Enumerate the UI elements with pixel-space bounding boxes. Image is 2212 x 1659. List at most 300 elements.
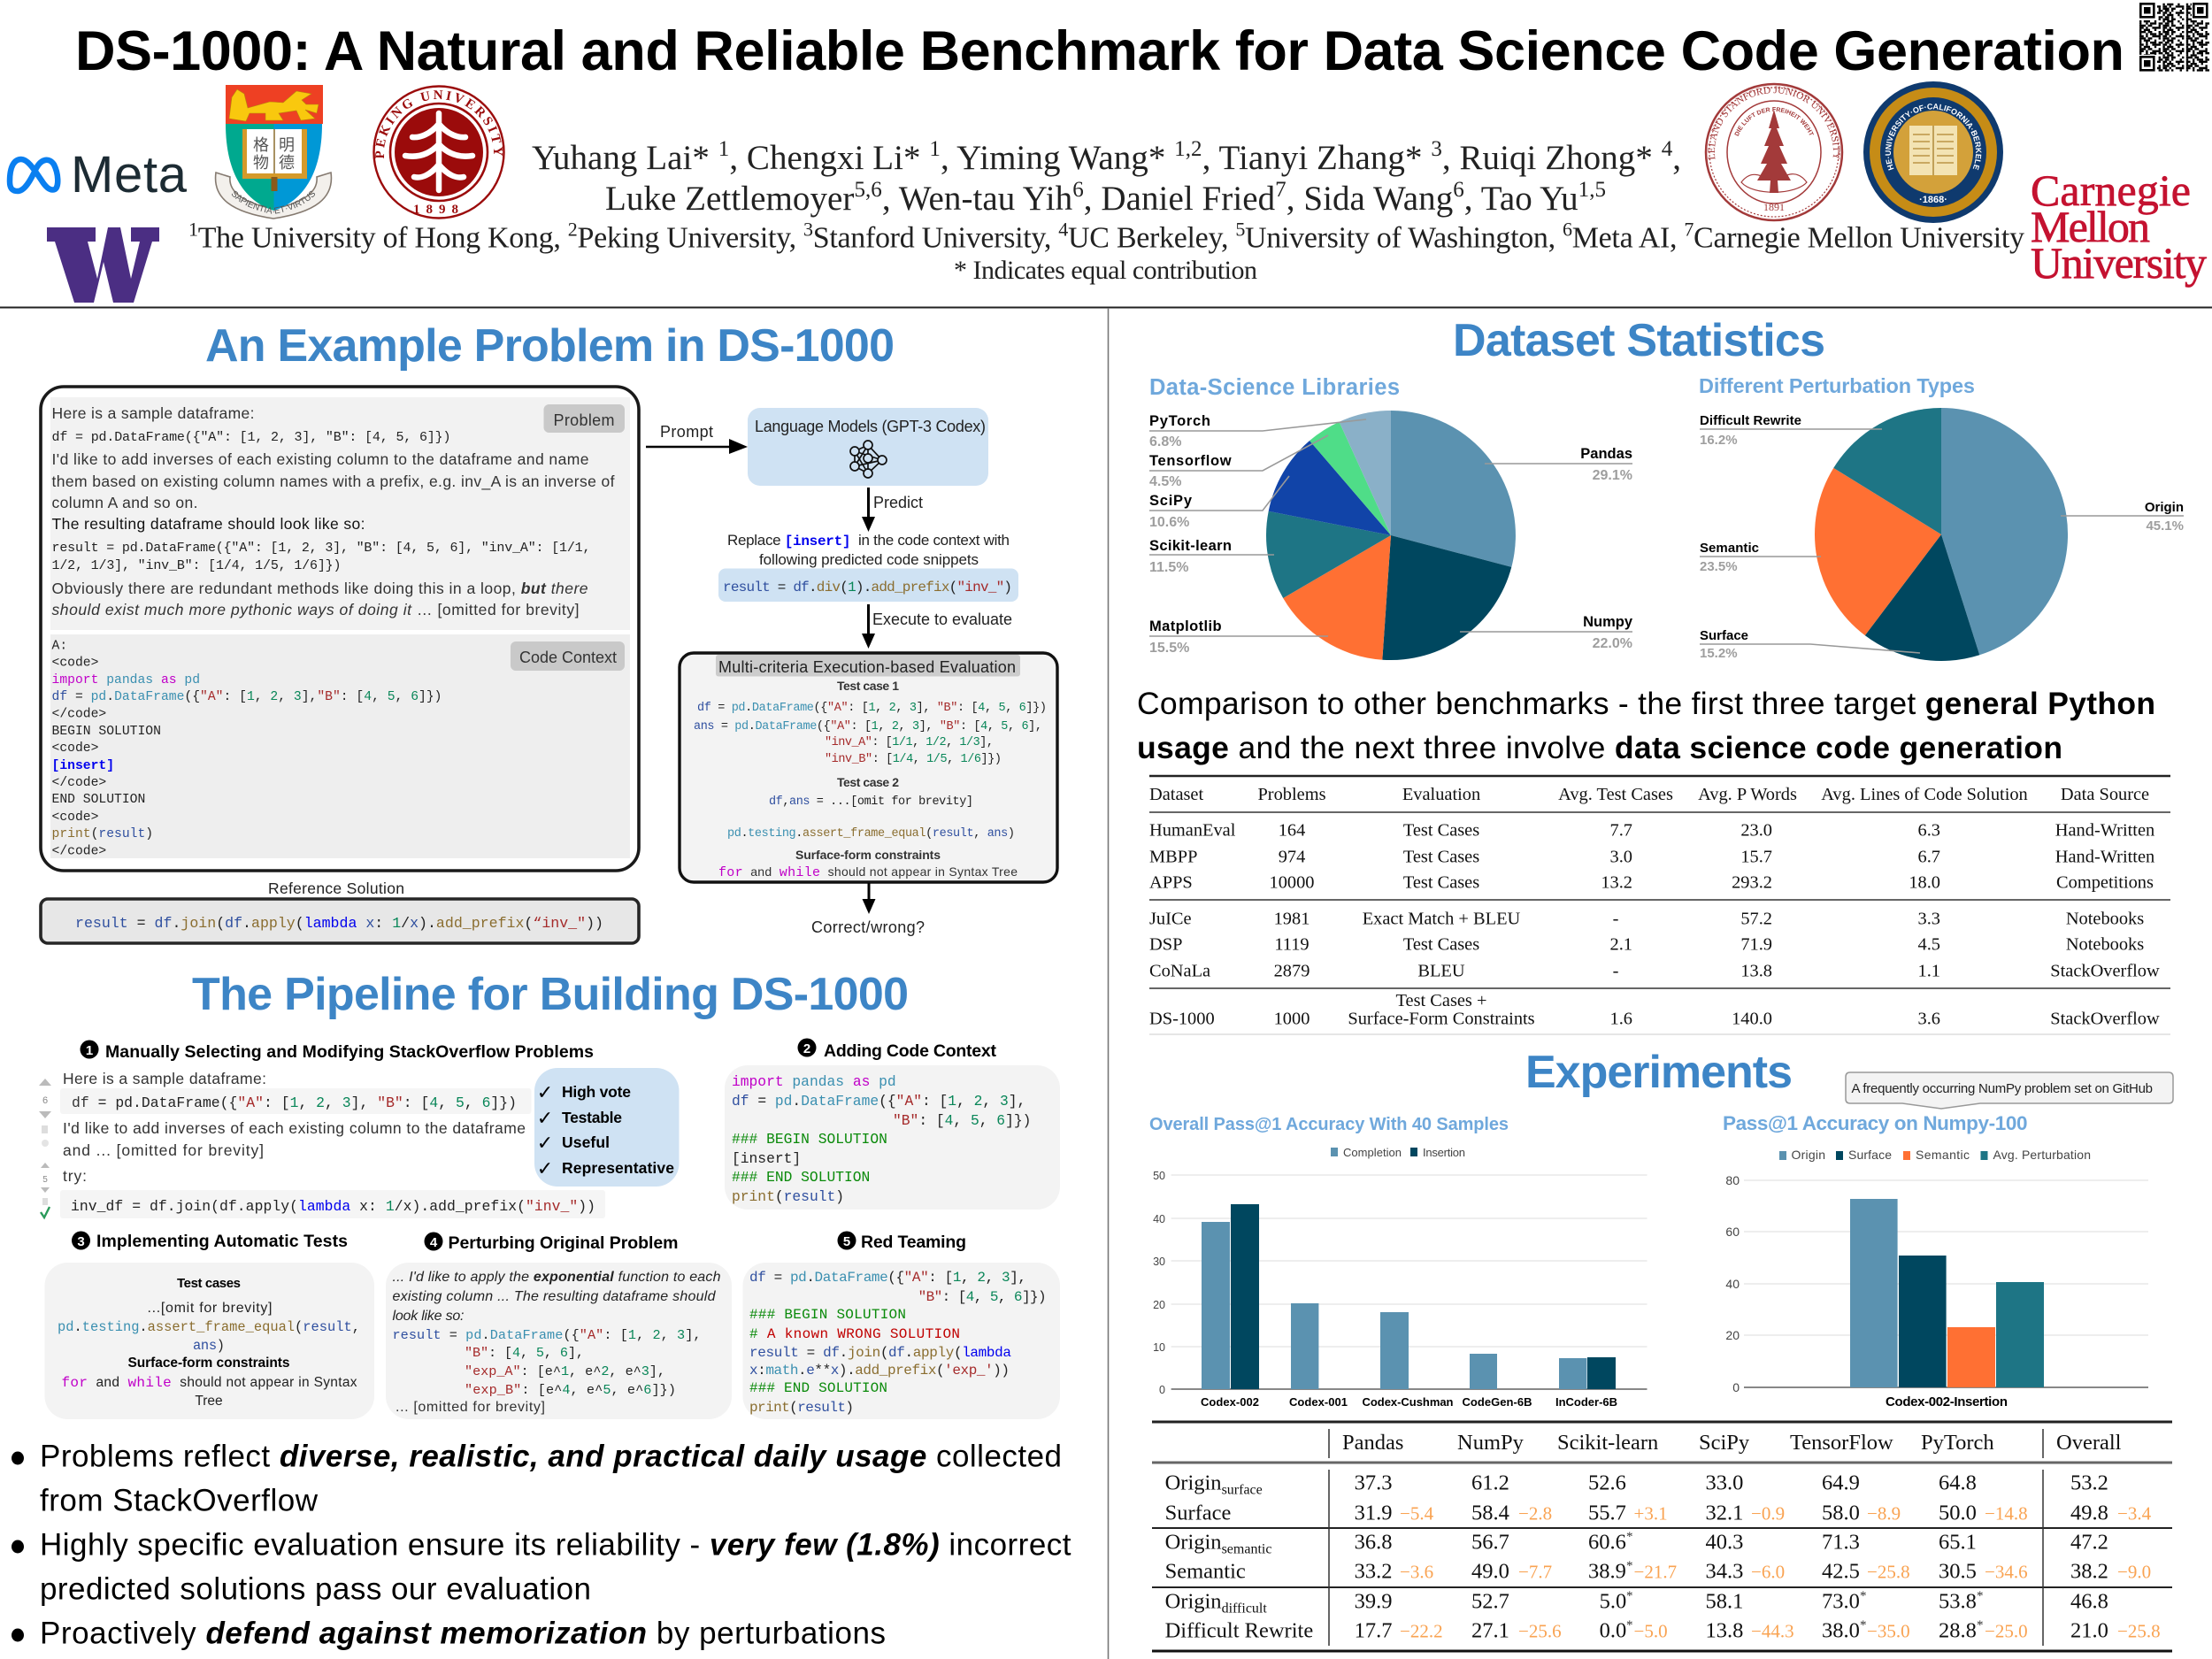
surface rows: 50.0 bbox=[1939, 1501, 1977, 1525]
step 1 heading: Manually Selecting and Modifying StackOverflow Problems bbox=[105, 1042, 594, 1062]
surface rows: Origin bbox=[1165, 1471, 1222, 1495]
step 4 heading: Perturbing Original Problem bbox=[448, 1233, 678, 1253]
test case code: "inv_B": [1/4, 1/5, 1/6]}) bbox=[825, 753, 1002, 766]
code context listing: [insert] bbox=[51, 759, 114, 773]
step 1: manually selecting problems: try: bbox=[63, 1167, 87, 1185]
problem text: I'd like to add inverses of each existing column to the dataframe and name bbox=[51, 450, 589, 468]
general python rows: Test Cases bbox=[1403, 848, 1479, 867]
step 2: adding code context: ### END SOLUTION bbox=[732, 1169, 870, 1186]
pie leaders bbox=[1700, 429, 2184, 653]
pie labels: 45.1% bbox=[2146, 518, 2184, 534]
data science rows: JuICe bbox=[1149, 910, 1192, 929]
general python rows bbox=[1149, 821, 2154, 892]
axis labels: 80 bbox=[1725, 1173, 1740, 1187]
step 5: red teaming: result = df.join(df.apply(lambda bbox=[749, 1345, 1011, 1361]
surface rows: 53.2 bbox=[2070, 1471, 2108, 1495]
icon: StackOverflow vote controls bbox=[39, 1079, 51, 1217]
table header: Dataset bbox=[1149, 785, 1203, 804]
general python rows: 23.0 bbox=[1740, 821, 1772, 841]
semantic rows: −25.8 bbox=[1867, 1561, 1910, 1582]
criteria callout: ✓ bbox=[537, 1082, 553, 1104]
affiliations: Carnegie Mellon University bbox=[1694, 221, 2024, 255]
authors: Luke Zettlemoyer bbox=[605, 180, 854, 218]
logo: HKU crest: 格 bbox=[253, 136, 269, 154]
pie labels bbox=[1700, 413, 2184, 661]
panel: multi-criteria evaluation: for and while should not appear in Syntax Tree bbox=[718, 864, 1018, 880]
pie labels: 11.5% bbox=[1149, 560, 1188, 575]
axis labels bbox=[1725, 1173, 1740, 1394]
step 1 heading: 1 bbox=[86, 1043, 93, 1058]
logo: Stanford seal: DIE LUFT DER FREIHEIT WEHT bbox=[1734, 107, 1814, 136]
bars bbox=[1202, 1204, 1616, 1389]
step 5: red teaming: ### END SOLUTION bbox=[749, 1380, 887, 1396]
icon: StackOverflow vote controls: 5 bbox=[42, 1175, 48, 1185]
step 1: manually selecting problems: Here is a sample dataframe: bbox=[63, 1070, 266, 1087]
DS-1000 row: DS-1000 bbox=[1149, 1009, 1215, 1028]
authors: , Wen-tau Yih bbox=[882, 180, 1072, 218]
DS-1000 row: 1000 bbox=[1274, 1009, 1310, 1028]
difficult rewrite rows: 73.0 bbox=[1822, 1589, 1860, 1614]
problem text: column A and so on. bbox=[51, 494, 198, 511]
bullet 2: predicted solutions pass our evaluation bbox=[40, 1571, 591, 1607]
data science rows: 2879 bbox=[1274, 961, 1310, 980]
icon: Meta infinity bbox=[10, 159, 58, 191]
panel: multi-criteria evaluation: df,ans = ...[omit for brevity] bbox=[769, 795, 973, 809]
table header: Problems bbox=[1257, 785, 1326, 804]
pie labels: Surface bbox=[1700, 628, 1748, 643]
step 3: implementing automatic tests: Surface-form constraints bbox=[127, 1356, 290, 1371]
authors: , Daniel Fried bbox=[1084, 180, 1276, 218]
step 5: red teaming: x:math.e**x).add_prefix('exp_')) bbox=[749, 1363, 1010, 1379]
general python rows: APPS bbox=[1149, 872, 1193, 892]
surface rows: 49.8 bbox=[2070, 1501, 2108, 1525]
step 1: manually selecting problems: I'd like to add inverses of each existing column to the dataframe bbox=[63, 1119, 526, 1137]
semantic rows: 36.8 bbox=[1355, 1531, 1392, 1554]
authors: 6 bbox=[1453, 178, 1464, 202]
surface rows: 58.0 bbox=[1822, 1501, 1860, 1525]
step 2 heading: 2 bbox=[803, 1041, 810, 1056]
step 2 heading: Adding Code Context bbox=[824, 1041, 996, 1061]
code context listing: <code> bbox=[51, 657, 98, 671]
icon: QR code bbox=[2139, 3, 2209, 73]
legend: Semantic bbox=[1916, 1148, 1970, 1162]
code context listing: </code> bbox=[51, 844, 106, 858]
affiliations: 7 bbox=[1684, 218, 1694, 241]
general python rows: Test Cases bbox=[1403, 872, 1479, 892]
general python rows: 6.3 bbox=[1918, 821, 1940, 841]
step 1: manually selecting problems: inv_df = df.join(df.apply(lambda x: 1/x).add_prefix("inv_")) bbox=[71, 1198, 595, 1215]
affiliations: University of Washington, bbox=[1245, 221, 1563, 255]
step 5: red teaming bbox=[743, 1232, 1060, 1419]
model labels: Codex-Cushman bbox=[1363, 1395, 1454, 1409]
chart: perturbation types pie bbox=[1699, 374, 2184, 661]
data science rows: 71.9 bbox=[1740, 934, 1772, 954]
pie labels: 16.2% bbox=[1700, 433, 1738, 448]
surface rows: 32.1 bbox=[1706, 1501, 1743, 1525]
semantic rows: 49.0 bbox=[1471, 1559, 1509, 1584]
heading: experiments: Experiments bbox=[1525, 1047, 1793, 1098]
model labels: InCoder-6B bbox=[1555, 1395, 1617, 1409]
DS-1000 row: 3.6 bbox=[1918, 1009, 1940, 1028]
data science rows: 57.2 bbox=[1740, 910, 1772, 929]
panel: problem and code context bbox=[41, 387, 639, 871]
heading: dataset statistics: Dataset Statistics bbox=[1453, 315, 1825, 366]
arrow: execute to evaluate: Execute to evaluate bbox=[872, 611, 1012, 628]
table: benchmark comparison bbox=[1149, 776, 2170, 1034]
surface rows: −0.9 bbox=[1751, 1502, 1785, 1524]
general python rows: 293.2 bbox=[1732, 872, 1772, 892]
step 2: adding code context: import pandas as pd bbox=[732, 1073, 896, 1090]
legend bbox=[1331, 1146, 1465, 1159]
table header: PyTorch bbox=[1921, 1431, 1994, 1455]
semantic rows: 38.9 bbox=[1588, 1559, 1626, 1584]
difficult rewrite rows: −25.0 bbox=[1985, 1621, 2028, 1642]
difficult rewrite rows: −25.8 bbox=[2117, 1621, 2161, 1642]
data science rows bbox=[1149, 910, 2160, 980]
DS-1000 row: Surface-Form Constraints bbox=[1348, 1009, 1535, 1028]
authors: 1,2 bbox=[1174, 137, 1202, 161]
table header: TensorFlow bbox=[1790, 1431, 1893, 1455]
semantic rows: 71.3 bbox=[1822, 1531, 1860, 1554]
table header: Scikit-learn bbox=[1557, 1431, 1658, 1455]
table header: Avg. P Words bbox=[1698, 785, 1797, 804]
logo: Peking University seal: 1898 bbox=[413, 203, 465, 217]
difficult rewrite rows: 39.9 bbox=[1355, 1589, 1392, 1614]
general python rows: Competitions bbox=[2056, 872, 2154, 892]
authors: 1,5 bbox=[1578, 178, 1606, 202]
authors: , Chengxi Li* bbox=[729, 139, 929, 177]
logo: Meta: Meta bbox=[71, 146, 188, 204]
step 5 heading: 5 bbox=[843, 1234, 850, 1249]
bullet 3: Proactively defend against memorization by perturbations bbox=[40, 1616, 886, 1651]
bullet 2: Highly specific evaluation ensure its reliability - very few (1.8%) incorrect bbox=[40, 1527, 1071, 1563]
problem text: Here is a sample dataframe: bbox=[51, 404, 255, 422]
surface rows: −8.9 bbox=[1867, 1502, 1901, 1524]
data science rows: Notebooks bbox=[2066, 910, 2144, 929]
pie labels: Matplotlib bbox=[1149, 618, 1222, 634]
problem text: Obviously there are redundant methods like doing this in a loop, but there bbox=[51, 580, 588, 597]
data science rows: 4.5 bbox=[1918, 934, 1940, 954]
problem text: df = pd.DataFrame({"A": [1, 2, 3], "B": [4, 5, 6]}) bbox=[51, 430, 451, 445]
step 3 heading: 3 bbox=[77, 1234, 85, 1249]
pie labels: Scikit-learn bbox=[1149, 538, 1232, 554]
table header: SciPy bbox=[1699, 1431, 1750, 1455]
pie slices bbox=[1815, 408, 2068, 661]
surface rows: Surface bbox=[1165, 1501, 1232, 1525]
pie labels: Tensorflow bbox=[1149, 453, 1232, 469]
difficult rewrite rows: −22.2 bbox=[1400, 1621, 1443, 1642]
step 5: red teaming: ### BEGIN SOLUTION bbox=[749, 1307, 906, 1323]
difficult rewrite rows: difficult bbox=[1222, 1601, 1267, 1616]
criteria callout: ✓ bbox=[537, 1133, 553, 1155]
difficult rewrite rows: * bbox=[1860, 1589, 1867, 1603]
general python rows: Hand-Written bbox=[2055, 821, 2154, 841]
semantic rows: 38.2 bbox=[2070, 1559, 2108, 1584]
callout: numpy-100 note: A frequently occurring NumPy problem set on GitHub bbox=[1851, 1081, 2153, 1096]
semantic rows: −7.7 bbox=[1518, 1561, 1552, 1582]
axis labels: 30 bbox=[1153, 1256, 1165, 1268]
DS-1000 row: StackOverflow bbox=[2050, 1009, 2160, 1028]
step 4: perturbing original problem: existing column ... The resulting dataframe should bbox=[393, 1289, 717, 1304]
affiliations: 5 bbox=[1235, 218, 1245, 241]
affiliations: Meta AI, bbox=[1572, 221, 1685, 255]
problem text: should exist much more pythonic ways of doing it … [omitted for brevity] bbox=[51, 601, 579, 618]
comparison description: Comparison to other benchmarks - the first three target general Python bbox=[1137, 686, 2155, 721]
chart: overall pass@1 accuracy: Overall Pass@1 Accuracy With 40 Samples bbox=[1149, 1115, 1509, 1134]
table: perturbation results bbox=[1152, 1422, 2172, 1651]
difficult rewrite rows: −35.0 bbox=[1867, 1621, 1910, 1642]
comparison description: usage and the next three involve data science code generation bbox=[1137, 730, 2062, 765]
icon: neural network bbox=[850, 441, 887, 478]
authors bbox=[532, 137, 1681, 218]
step 3: implementing automatic tests: ...[omit for brevity] bbox=[147, 1301, 273, 1316]
code context listing: <code> bbox=[51, 741, 98, 756]
semantic rows: −6.0 bbox=[1751, 1561, 1785, 1582]
step 3 heading: Implementing Automatic Tests bbox=[96, 1232, 348, 1251]
legend bbox=[1779, 1148, 2091, 1162]
replace note bbox=[727, 532, 1010, 568]
pie labels: 6.8% bbox=[1149, 434, 1181, 449]
chart: data-science libraries pie: Data-Science Libraries bbox=[1149, 375, 1400, 400]
chart: pass@1 on numpy-100: Pass@1 Accuracy on Numpy-100 bbox=[1723, 1112, 2028, 1134]
general python rows: 6.7 bbox=[1918, 848, 1940, 867]
general python rows: 3.0 bbox=[1610, 848, 1632, 867]
table header: Evaluation bbox=[1402, 785, 1480, 804]
difficult rewrite rows: * bbox=[1977, 1589, 1984, 1603]
step 4: perturbing original problem: look like so: bbox=[393, 1309, 464, 1324]
gridlines bbox=[1171, 1175, 1647, 1347]
logo: Carnegie Mellon University: Mellon bbox=[2031, 202, 2150, 251]
step 2: adding code context bbox=[725, 1039, 1060, 1210]
step 1: manually selecting problems bbox=[39, 1041, 680, 1218]
code context listing: </code> bbox=[51, 776, 106, 790]
chip: code context: Code Context bbox=[519, 649, 617, 666]
pie labels: Semantic bbox=[1700, 541, 1759, 556]
surface rows: 37.3 bbox=[1355, 1471, 1392, 1495]
equal contribution note: * Indicates equal contribution bbox=[954, 256, 1257, 285]
axis labels: 0 bbox=[1732, 1380, 1740, 1394]
step 4: perturbing original problem: result = pd.DataFrame({"A": [1, 2, 3], bbox=[393, 1327, 701, 1343]
affiliations: Peking University, bbox=[577, 221, 803, 255]
reference solution bbox=[41, 879, 639, 943]
table header: Data Source bbox=[2061, 785, 2149, 804]
table header: Pandas bbox=[1342, 1431, 1403, 1455]
authors: 3 bbox=[1431, 137, 1442, 161]
step 3: implementing automatic tests: pd.testing.assert_frame_equal(result, bbox=[58, 1319, 360, 1335]
step 2: adding code context: df = pd.DataFrame({"A": [1, 2, 3], bbox=[732, 1093, 1025, 1110]
pie slices bbox=[1266, 411, 1516, 660]
pie labels: Pandas bbox=[1580, 446, 1632, 462]
authors: , Yiming Wang* bbox=[941, 139, 1174, 177]
difficult rewrite rows: * bbox=[1626, 1618, 1633, 1632]
step 3: implementing automatic tests bbox=[44, 1232, 374, 1419]
general python rows: 7.7 bbox=[1610, 821, 1632, 841]
model labels: CodeGen-6B bbox=[1462, 1395, 1532, 1409]
difficult rewrite rows: 58.1 bbox=[1706, 1589, 1743, 1614]
authors: , Sida Wang bbox=[1286, 180, 1453, 218]
surface rows: −5.4 bbox=[1400, 1502, 1434, 1524]
pie labels bbox=[1149, 413, 1633, 656]
criteria callout: High vote bbox=[562, 1083, 631, 1101]
pie labels: Numpy bbox=[1583, 614, 1633, 630]
criteria callout: ✓ bbox=[537, 1108, 553, 1130]
legend: Insertion bbox=[1423, 1146, 1465, 1159]
chart: data-science libraries pie bbox=[1149, 375, 1633, 660]
semantic rows: −21.7 bbox=[1633, 1561, 1677, 1582]
test case code: "inv_A": [1/1, 1/2, 1/3], bbox=[825, 736, 994, 749]
difficult rewrite rows: * bbox=[1977, 1618, 1984, 1632]
reference solution: Reference Solution bbox=[268, 879, 404, 897]
semantic rows: 34.3 bbox=[1706, 1559, 1743, 1584]
chart: perturbation types pie: Different Perturbation Types bbox=[1699, 374, 1975, 397]
problem text bbox=[51, 404, 615, 618]
data science rows: - bbox=[1613, 961, 1619, 980]
semantic rows: semantic bbox=[1222, 1541, 1271, 1557]
step 3: implementing automatic tests: Test cases bbox=[177, 1276, 241, 1291]
panel: multi-criteria evaluation: pd.testing.assert_frame_equal(result, ans) bbox=[727, 827, 1015, 841]
general python rows: 164 bbox=[1279, 821, 1305, 841]
data science rows: Exact Match + BLEU bbox=[1363, 910, 1521, 929]
DS-1000 row: Test Cases + bbox=[1396, 991, 1486, 1010]
affiliations: 4 bbox=[1058, 218, 1068, 241]
authors: , Tianyi Zhang* bbox=[1202, 139, 1431, 177]
step 2: adding code context: ### BEGIN SOLUTION bbox=[732, 1131, 887, 1148]
semantic rows: 60.6 bbox=[1588, 1531, 1626, 1554]
panel: multi-criteria evaluation: Surface-form constraints bbox=[795, 848, 941, 862]
semantic rows: 47.2 bbox=[2070, 1531, 2108, 1554]
step 4 heading: 4 bbox=[430, 1235, 438, 1250]
bullet 1: Problems reflect diverse, realistic, and practical daily usage collected bbox=[40, 1439, 1062, 1474]
chart: overall pass@1 accuracy bbox=[1149, 1115, 1647, 1409]
difficult rewrite rows: 27.1 bbox=[1471, 1619, 1509, 1642]
data science rows: 1119 bbox=[1274, 934, 1310, 954]
semantic rows: Origin bbox=[1165, 1531, 1222, 1554]
data science rows: Notebooks bbox=[2066, 934, 2144, 954]
arrow: prompt: Prompt bbox=[660, 423, 713, 441]
logo: Meta bbox=[10, 146, 188, 204]
surface rows: 55.7 bbox=[1588, 1501, 1626, 1525]
pie labels: 23.5% bbox=[1700, 559, 1738, 574]
semantic rows: Semantic bbox=[1165, 1559, 1246, 1584]
legend: Surface bbox=[1848, 1148, 1892, 1162]
panel: multi-criteria evaluation: Test case 2 bbox=[837, 775, 899, 789]
replace note: Replace [insert] in the code context with bbox=[727, 532, 1010, 549]
logo: HKU crest: 物 bbox=[253, 154, 269, 172]
test case code: ans = pd.DataFrame({"A": [1, 2, 3], "B": [4, 5, 6], bbox=[694, 720, 1042, 733]
table header bbox=[1342, 1431, 2122, 1455]
step 3: implementing automatic tests: Tree bbox=[195, 1394, 223, 1409]
logo: Peking University seal bbox=[373, 85, 505, 219]
difficult rewrite rows: * bbox=[1860, 1618, 1867, 1632]
pie labels: 15.2% bbox=[1700, 646, 1738, 661]
affiliations: 1 bbox=[188, 218, 198, 241]
affiliations: The University of Hong Kong, bbox=[198, 221, 568, 255]
pie labels: 29.1% bbox=[1593, 468, 1632, 483]
surface rows: 58.4 bbox=[1471, 1501, 1509, 1525]
arrow: correct or wrong: Correct/wrong? bbox=[811, 918, 925, 936]
difficult rewrite rows: −5.0 bbox=[1633, 1621, 1668, 1642]
bullet 1 bbox=[12, 1439, 1062, 1518]
pie labels: 22.0% bbox=[1593, 636, 1632, 651]
code context listing bbox=[51, 639, 442, 858]
authors: 6 bbox=[1072, 178, 1084, 202]
arrow: predict: Predict bbox=[873, 494, 923, 511]
problem text: The resulting dataframe should look like so: bbox=[51, 515, 365, 533]
model labels bbox=[1201, 1395, 1617, 1409]
difficult rewrite rows: * bbox=[1626, 1589, 1633, 1603]
table header bbox=[1149, 785, 2149, 804]
logo: Carnegie Mellon University: University bbox=[2031, 238, 2207, 288]
arrow: execute to evaluate bbox=[862, 604, 1012, 649]
model label: Codex-002-Insertion bbox=[1886, 1394, 2008, 1409]
surface rows: 52.6 bbox=[1588, 1471, 1626, 1495]
reference solution: result = df.join(df.apply(lambda x: 1/x).add_prefix(“inv_")) bbox=[75, 915, 603, 932]
authors: , bbox=[1672, 139, 1681, 177]
general python rows: Hand-Written bbox=[2055, 848, 2154, 867]
legend: Origin bbox=[1791, 1148, 1825, 1162]
difficult rewrite rows: −44.3 bbox=[1751, 1621, 1794, 1642]
table header: Overall bbox=[2056, 1431, 2122, 1455]
authors: Yuhang Lai* bbox=[532, 139, 710, 177]
code context listing: END SOLUTION bbox=[51, 793, 145, 807]
data science rows: CoNaLa bbox=[1149, 961, 1210, 980]
data science rows: 1981 bbox=[1274, 910, 1310, 929]
step 5 heading: Red Teaming bbox=[861, 1233, 966, 1252]
comparison description bbox=[1137, 686, 2155, 765]
panel: multi-criteria evaluation bbox=[680, 653, 1057, 882]
authors: 1 bbox=[718, 137, 729, 161]
panel: language models bbox=[748, 408, 988, 486]
bullet 1: from StackOverflow bbox=[40, 1483, 319, 1518]
bars bbox=[1850, 1199, 2044, 1387]
general python rows: 974 bbox=[1279, 848, 1305, 867]
data science rows: - bbox=[1613, 910, 1619, 929]
semantic rows: −3.6 bbox=[1400, 1561, 1433, 1582]
affiliations: UC Berkeley, bbox=[1068, 221, 1236, 255]
criteria callout: Useful bbox=[562, 1133, 610, 1151]
logo: Peking University seal: PEKING UNIVERSITY bbox=[375, 90, 503, 159]
axis labels: 10 bbox=[1153, 1341, 1165, 1354]
heading: example problem: An Example Problem in DS-1000 bbox=[205, 320, 895, 372]
table header: Avg. Lines of Code Solution bbox=[1821, 785, 2028, 804]
difficult rewrite rows: 53.8 bbox=[1939, 1589, 1977, 1614]
general python rows: 10000 bbox=[1270, 872, 1314, 892]
pie labels: 15.5% bbox=[1149, 641, 1189, 656]
step 2: adding code context: "B": [4, 5, 6]}) bbox=[893, 1112, 1031, 1129]
data science rows: 3.3 bbox=[1918, 910, 1940, 929]
axis labels: 40 bbox=[1725, 1277, 1740, 1291]
panel: language models: Language Models (GPT-3 Codex) bbox=[755, 418, 986, 435]
problem text: them based on existing column names with a prefix, e.g. inv_A is an inverse of bbox=[51, 472, 615, 491]
semantic rows: * bbox=[1626, 1530, 1633, 1544]
step 4: perturbing original problem: "B": [4, 5, 6], bbox=[465, 1345, 584, 1361]
arrow: correct or wrong bbox=[811, 883, 925, 936]
pie labels: 10.6% bbox=[1149, 515, 1189, 530]
chip: code context bbox=[511, 641, 625, 671]
logo: HKU crest: 德 bbox=[279, 154, 295, 172]
semantic rows: 56.7 bbox=[1471, 1531, 1509, 1554]
surface rows: −3.4 bbox=[2117, 1502, 2152, 1524]
general python rows: MBPP bbox=[1149, 848, 1197, 867]
axis labels: 60 bbox=[1725, 1225, 1740, 1239]
data science rows: BLEU bbox=[1417, 961, 1465, 980]
surface rows: +3.1 bbox=[1633, 1502, 1668, 1524]
bullet 2 bbox=[12, 1527, 1071, 1607]
semantic rows: 42.5 bbox=[1822, 1559, 1860, 1584]
semantic rows: 30.5 bbox=[1939, 1559, 1977, 1584]
model labels: Codex-002 bbox=[1201, 1395, 1259, 1409]
chip: problem: Problem bbox=[554, 411, 614, 429]
